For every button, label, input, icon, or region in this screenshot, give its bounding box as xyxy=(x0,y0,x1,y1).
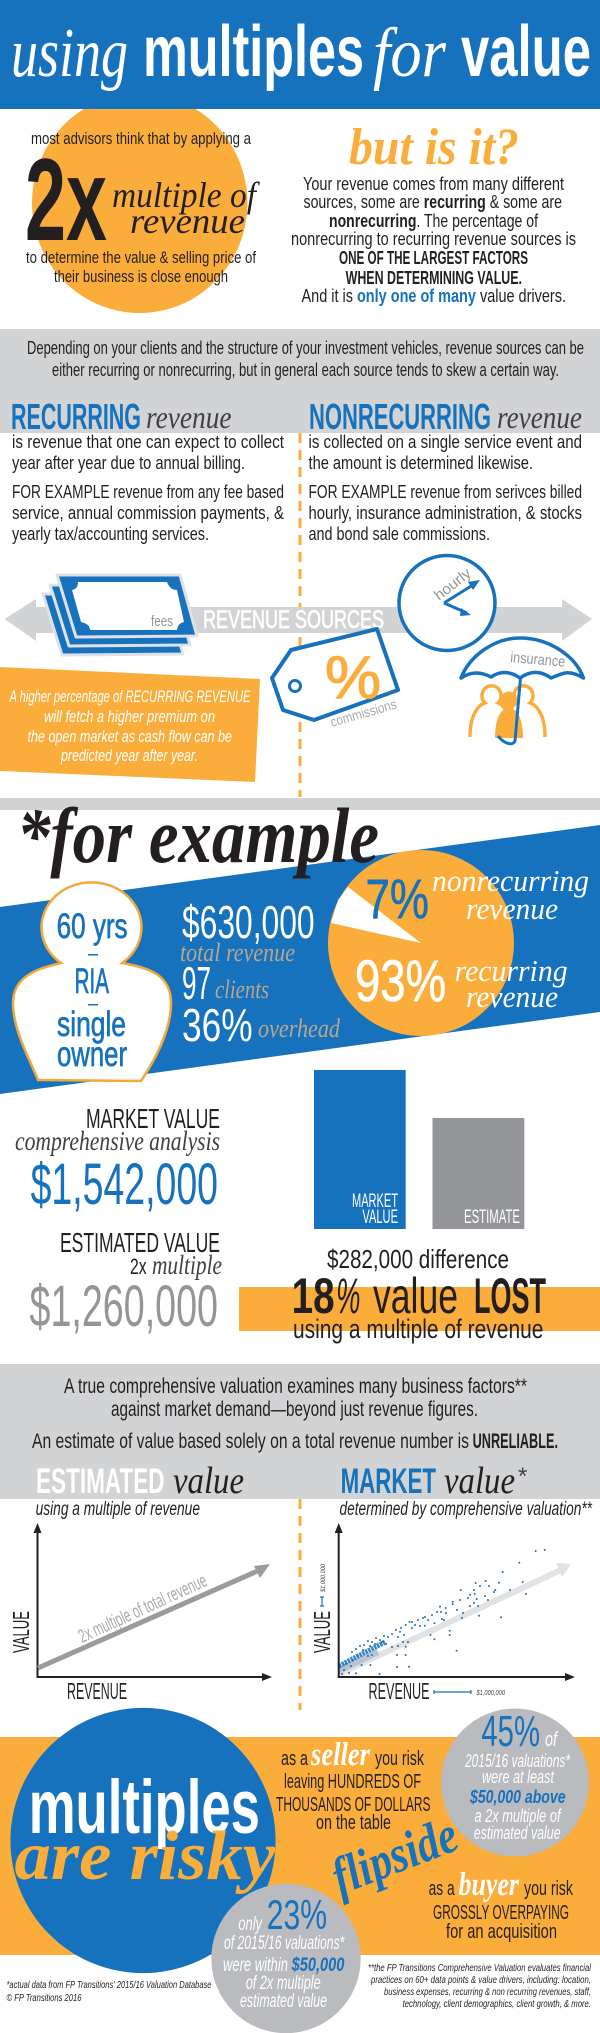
callout: 45 percent circle xyxy=(441,1707,589,1856)
pie chart: revenue mix: 93% xyxy=(355,949,446,1014)
callout: recurring premium: the open market as cash flow can be xyxy=(28,727,232,746)
text block: 2x multiple claim: revenue xyxy=(130,201,245,241)
callout: 23 percent circle: of 2x multiple xyxy=(246,1973,321,1994)
icon: hourly clock: hourly xyxy=(431,565,475,604)
heading: recurring revenue: RECURRING xyxy=(11,396,141,437)
text block: 2x multiple claim: multiple of xyxy=(112,175,261,215)
pie chart: revenue mix: 7% xyxy=(366,867,429,930)
text block: 2x multiple claim: most advisors think that by applying a xyxy=(31,129,251,148)
callout: 23 percent circle: were within xyxy=(223,1955,288,1976)
line chart: estimated value xyxy=(8,1523,272,1704)
callout: 45 percent circle: were at least xyxy=(482,1767,555,1787)
heading: estimated value: ESTIMATED xyxy=(36,1462,165,1501)
text block: recurring description: is revenue that one can expect to collect xyxy=(12,431,284,452)
icon: person profile xyxy=(13,882,171,1081)
text block: practice stats: clients xyxy=(215,975,269,1004)
text block: practice stats: $630,000 xyxy=(182,896,315,948)
callout: recurring premium: A higher percentage of RECURRING REVENUE xyxy=(9,687,251,706)
callout: 23 percent circle: estimated value xyxy=(240,1991,327,2012)
icon: hourly clock xyxy=(399,556,495,650)
text block: recurring description: FOR EXAMPLE revenue from any fee based xyxy=(12,481,284,502)
callout: 23 percent circle: of 2015/16 valuations* xyxy=(224,1933,345,1954)
callout: value lost: 18 xyxy=(292,1268,335,1324)
text block: seller risk: as a xyxy=(281,1748,309,1770)
pie chart: revenue mix: nonrecurring xyxy=(432,863,589,898)
bar chart: market vs estimate xyxy=(314,1070,524,1229)
text block: buyer risk: as a xyxy=(429,1878,455,1900)
text block: seller risk: you risk xyxy=(375,1748,425,1770)
text block: recurring description xyxy=(12,431,285,544)
callout: 45 percent circle: a 2x multiple of xyxy=(474,1806,562,1826)
icon: commissions tag: % xyxy=(325,644,381,711)
text block: practice stats: overhead xyxy=(258,1014,341,1043)
callout: value lost: value xyxy=(373,1268,458,1324)
panel: grey comprehensive valuation band xyxy=(0,1364,600,1499)
text block: market value: comprehensive analysis xyxy=(15,1126,220,1156)
icon: commissions tag: commissions xyxy=(328,696,398,730)
text block: recurring description: year after year due to annual billing. xyxy=(12,452,245,473)
icon: person profile: RIA xyxy=(75,962,109,1001)
text block: seller risk: seller xyxy=(310,1737,371,1773)
callout: 23 percent circle xyxy=(211,1884,361,2033)
callout: recurring premium: predicted year after year. xyxy=(60,746,198,765)
pie chart: revenue mix: recurring xyxy=(455,953,568,988)
text block: seller risk: THOUSANDS OF DOLLARS xyxy=(276,1794,430,1816)
text block: estimated value: ESTIMATED VALUE xyxy=(60,1227,220,1258)
callout: recurring premium xyxy=(0,667,260,782)
panel: blue example band xyxy=(0,825,600,1094)
text block: market value: MARKET VALUE xyxy=(86,1103,220,1134)
text block: buyer risk: you risk xyxy=(524,1878,574,1900)
line chart: estimated value: VALUE xyxy=(8,1611,34,1653)
heading: estimated value: value xyxy=(173,1460,244,1502)
text block: revenue explanation: WHEN DETERMINING VALUE. xyxy=(346,268,522,288)
text block: practice stats: 97 xyxy=(182,957,211,1009)
panel: multiples are risky circle xyxy=(10,1708,276,1973)
text block: seller risk: leaving HUNDREDS OF xyxy=(284,1771,421,1793)
heading: recurring revenue: revenue xyxy=(146,399,232,435)
callout: 23 percent circle: only xyxy=(238,1914,263,1935)
heading: nonrecurring revenue: revenue xyxy=(497,399,582,435)
text block: estimated value: $1,260,000 xyxy=(30,1274,218,1339)
callout: 45 percent circle: of xyxy=(545,1729,559,1751)
bar chart: market vs estimate: VALUE xyxy=(362,1207,398,1228)
footnote: data source: © FP Transitions 2016 xyxy=(6,1993,82,2004)
footnote: data source xyxy=(6,1980,212,2004)
icon: person profile: single xyxy=(57,1005,126,1044)
text block: 2x multiple claim xyxy=(25,129,261,286)
panel: multiples are risky circle: multiples xyxy=(29,1765,260,1850)
text block: 2x multiple claim: their business is close enough xyxy=(54,267,228,286)
panel: orange risk band xyxy=(0,1737,600,1955)
heading: flipside: flipside xyxy=(324,1806,466,1906)
panel: title banner: for xyxy=(373,15,447,92)
text block: market value xyxy=(15,1103,220,1217)
panel: multiples are risky circle: are risky xyxy=(14,1818,276,1895)
text block: buyer risk: buyer xyxy=(458,1867,520,1903)
pie chart: revenue mix: revenue xyxy=(466,979,558,1014)
icon: person profile: 60 yrs xyxy=(57,907,128,946)
line chart: estimated value: 2x multiple of total revenue xyxy=(75,1571,210,1648)
text block: market value: $1,542,000 xyxy=(31,1152,218,1217)
scatter chart: market value: REVENUE xyxy=(368,1678,430,1704)
scatter chart: market value: $1,000,000 xyxy=(320,1564,327,1593)
bar chart: market vs estimate: ESTIMATE xyxy=(464,1207,520,1228)
text block: buyer risk: for an acquisition xyxy=(446,1921,557,1943)
icon: insurance umbrella with family xyxy=(461,638,584,744)
text block: seller risk xyxy=(276,1737,430,1834)
text block: practice stats xyxy=(180,896,341,1051)
text block: buyer risk xyxy=(429,1867,574,1943)
footnote: comprehensive valuation xyxy=(368,1963,592,2010)
text block: revenue explanation xyxy=(291,174,576,306)
text block: nonrecurring description: and bond sale commissions. xyxy=(308,523,490,544)
panel: title banner: using xyxy=(11,15,128,92)
callout: value lost: % xyxy=(336,1268,360,1324)
icon: commissions tag xyxy=(272,629,398,730)
callout: 45 percent circle: estimated value xyxy=(474,1823,561,1843)
callout: value lost: $282,000 difference xyxy=(327,1244,509,1274)
icon: person profile: owner xyxy=(57,1035,127,1074)
text block: 2x multiple claim: 2x xyxy=(25,134,107,265)
text block: revenue explanation: And it is only one of many value drivers. xyxy=(302,286,566,306)
text block: estimated value xyxy=(30,1227,222,1339)
panel: title banner xyxy=(0,0,600,109)
text block: estimated value: multiple xyxy=(152,1250,222,1280)
text block: revenue explanation: nonrecurring. The percentage of xyxy=(329,211,539,231)
icon: fees bills: fees xyxy=(151,613,173,630)
text block: estimated value: 2x xyxy=(130,1254,147,1279)
pie chart: revenue mix: revenue xyxy=(466,891,558,926)
callout: 45 percent circle: $50,000 above xyxy=(469,1787,566,1807)
text block: recurring description: yearly tax/accounting services. xyxy=(12,523,209,544)
callout: 23 percent circle: $50,000 xyxy=(291,1955,345,1976)
heading: but is it?: but is it? xyxy=(349,119,519,176)
arrow: revenue sources: REVENUE SOURCES xyxy=(203,606,384,634)
pie chart: revenue mix xyxy=(328,850,589,1036)
text block: revenue explanation: sources, some are recurring & some are xyxy=(304,192,562,212)
text block: practice stats: total revenue xyxy=(180,938,295,967)
panel: grey comprehensive valuation band: An estimate of value based solely on a total revenue number is xyxy=(32,1430,469,1453)
orange circle behind 2x xyxy=(32,93,247,313)
text block: seller risk: on the table xyxy=(316,1812,391,1834)
icon: fees bills xyxy=(43,575,197,655)
bar chart: market vs estimate: MARKET xyxy=(352,1191,398,1212)
panel: title banner: multiples xyxy=(143,12,364,92)
text block: 2x multiple claim: to determine the value & selling price of xyxy=(26,248,256,267)
scatter chart: market value xyxy=(309,1523,575,1704)
text block: recurring description: service, annual commission payments, & xyxy=(12,502,285,523)
heading: market value: value xyxy=(444,1460,515,1502)
icon: insurance umbrella with family: insurance xyxy=(510,649,566,671)
line chart: estimated value: REVENUE xyxy=(67,1678,127,1704)
callout: value lost xyxy=(239,1244,600,1344)
heading: nonrecurring revenue: NONRECURRING xyxy=(309,396,491,437)
heading: market value: MARKET xyxy=(341,1462,436,1501)
callout: recurring premium: will fetch a higher premium on xyxy=(44,707,215,726)
callout: 45 percent circle: 45% xyxy=(481,1707,540,1756)
panel: grey intro band xyxy=(0,329,600,433)
footnote: data source: *actual data from FP Transitions' 2015/16 Valuation Database xyxy=(6,1980,212,1991)
subheading: using a multiple: using a multiple of revenue xyxy=(36,1499,200,1520)
heading: market value: * xyxy=(518,1463,527,1490)
text block: nonrecurring description: the amount is determined likewise. xyxy=(308,452,533,473)
scatter chart: market value: VALUE xyxy=(309,1611,335,1653)
scatter chart: market value: $1,000,000 xyxy=(476,1690,505,1697)
callout: 23 percent circle: 23% xyxy=(267,1891,327,1938)
arrow: revenue sources xyxy=(5,599,592,641)
heading: for example: *for example xyxy=(17,792,379,879)
text block: practice stats: 36% xyxy=(182,999,253,1051)
text block: nonrecurring description xyxy=(308,431,582,544)
